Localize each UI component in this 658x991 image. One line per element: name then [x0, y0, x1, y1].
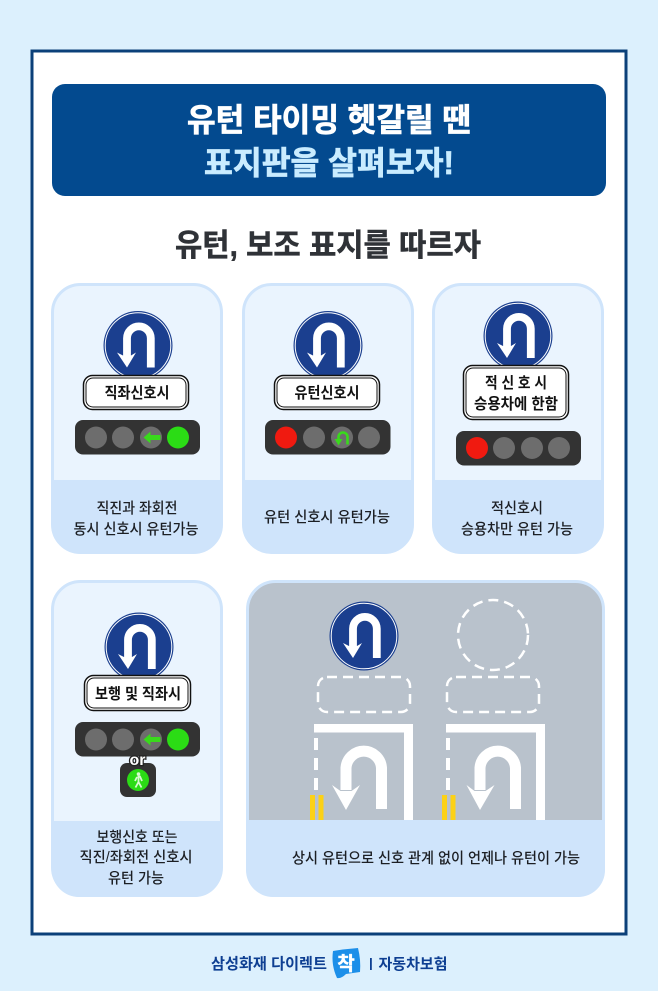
caption [461, 500, 573, 538]
caption [74, 500, 199, 538]
supplementary plate [464, 366, 568, 420]
caption [80, 829, 192, 887]
panel: always allowed u-turn [246, 582, 605, 897]
caption: 직진과 좌회전 [96, 500, 178, 517]
supplementary plate [84, 676, 190, 710]
caption: 유턴 신호시 유턴가능 [264, 509, 390, 526]
traffic light [75, 420, 200, 454]
caption: 상시 유턴으로 신호 관계 없이 언제나 유턴이 가능 [292, 850, 580, 867]
supplementary plate: 직좌신호시 [104, 384, 170, 402]
or label: or [130, 752, 146, 769]
footer brand: 삼성화재 다이렉트 [211, 955, 327, 973]
icon: u-turn sign [104, 311, 172, 380]
traffic light [456, 431, 581, 466]
panel: red light, passenger cars only [433, 284, 603, 553]
caption: 승용차만 유턴 가능 [461, 521, 573, 538]
panel: u-turn signal [243, 284, 413, 553]
icon: u-turn sign [294, 311, 362, 380]
supplementary plate: 유턴신호시 [294, 384, 360, 402]
icon: u-turn sign [484, 302, 552, 370]
title banner [52, 84, 606, 196]
supplementary plate [84, 376, 188, 410]
subheading: 유턴, 보조 표지를 따르자 [175, 228, 481, 263]
road marking: right lane [444, 724, 545, 820]
icon: u-turn sign [104, 612, 174, 682]
supplementary plate: 적 신 호 시 [485, 374, 547, 392]
title banner: 유턴 타이밍 헷갈릴 땐 [187, 102, 471, 138]
icon: brand badge: 착 [337, 953, 355, 975]
caption: 직진/좌회전 신호시 [80, 849, 192, 866]
icon: u-turn sign [330, 602, 398, 670]
title banner: 표지판을 살펴보자! [204, 145, 454, 181]
supplementary plate [274, 376, 380, 410]
caption: 유턴 가능 [108, 870, 164, 887]
footer brand: 자동차보험 [378, 956, 448, 973]
traffic light [75, 722, 200, 756]
caption: 동시 신호시 유턴가능 [74, 521, 199, 538]
supplementary plate: 보행 및 직좌시 [95, 685, 181, 703]
footer brand [211, 948, 448, 978]
dashed empty sign outline [458, 600, 528, 670]
pedestrian signal [120, 763, 156, 797]
caption: 적신호시 [491, 500, 543, 517]
icon: brand badge [332, 948, 360, 978]
traffic light [265, 420, 390, 454]
panel: pedestrian or straight/left signal [52, 582, 222, 897]
road marking: left lane [312, 724, 413, 820]
panel: straight and left-turn signal [52, 284, 222, 553]
supplementary plate: 승용차에 한함 [474, 395, 558, 413]
caption: 보행신호 또는 [96, 829, 178, 846]
dashed plate outlines [318, 677, 539, 712]
